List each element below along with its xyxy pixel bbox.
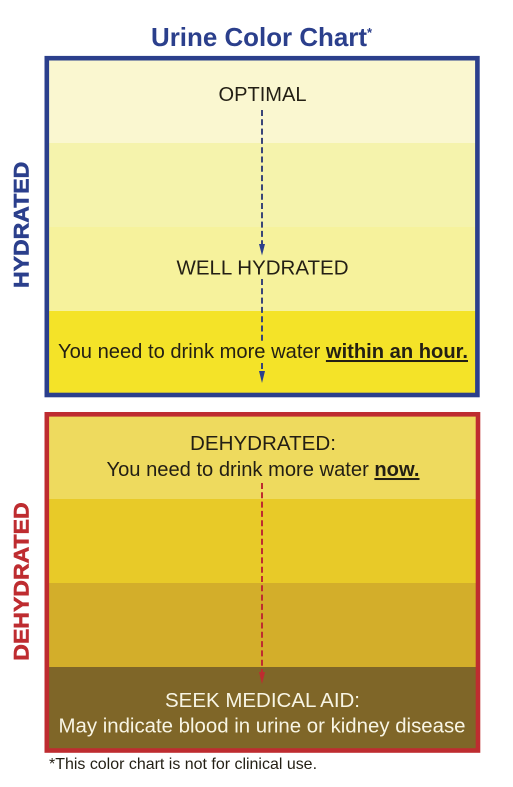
title: Urine Color Chart — [151, 22, 367, 52]
band: optimal — [47, 59, 477, 143]
band: dark gold — [47, 583, 478, 667]
title: * — [367, 25, 373, 40]
side label: hydrated: HYDRATED — [9, 162, 33, 288]
band: dehydrated — [47, 415, 478, 499]
label: well hydrated: WELL HYDRATED — [176, 258, 348, 280]
band: light yellow — [47, 143, 477, 227]
label: blood in urine warning: May indicate blood in urine or kidney disease — [58, 716, 466, 738]
label: optimal: OPTIMAL — [218, 84, 306, 106]
label: drink now: You need to drink more water now. — [106, 459, 420, 481]
arrow: optimal to well hydrated — [259, 110, 265, 256]
arrow: well hydrated to drink within an hour — [259, 279, 265, 383]
band: seek medical aid — [47, 667, 478, 751]
hydrated frame — [47, 58, 477, 395]
arrow: dehydrated to seek medical aid — [259, 483, 265, 684]
panel: hydrated — [47, 58, 477, 395]
panel: dehydrated — [47, 414, 478, 751]
label: dehydrated: DEHYDRATED: — [190, 433, 336, 455]
label: drink within an hour: You need to drink more water within an hour. — [58, 341, 468, 363]
band: well hydrated — [47, 227, 477, 311]
side label: dehydrated: DEHYDRATED — [9, 502, 33, 661]
band: drink within an hour — [47, 311, 477, 395]
band: golden yellow — [47, 499, 478, 583]
footnote: *This color chart is not for clinical use. — [49, 756, 317, 773]
dehydrated frame — [47, 414, 478, 750]
label: seek medical aid: SEEK MEDICAL AID: — [165, 690, 360, 712]
